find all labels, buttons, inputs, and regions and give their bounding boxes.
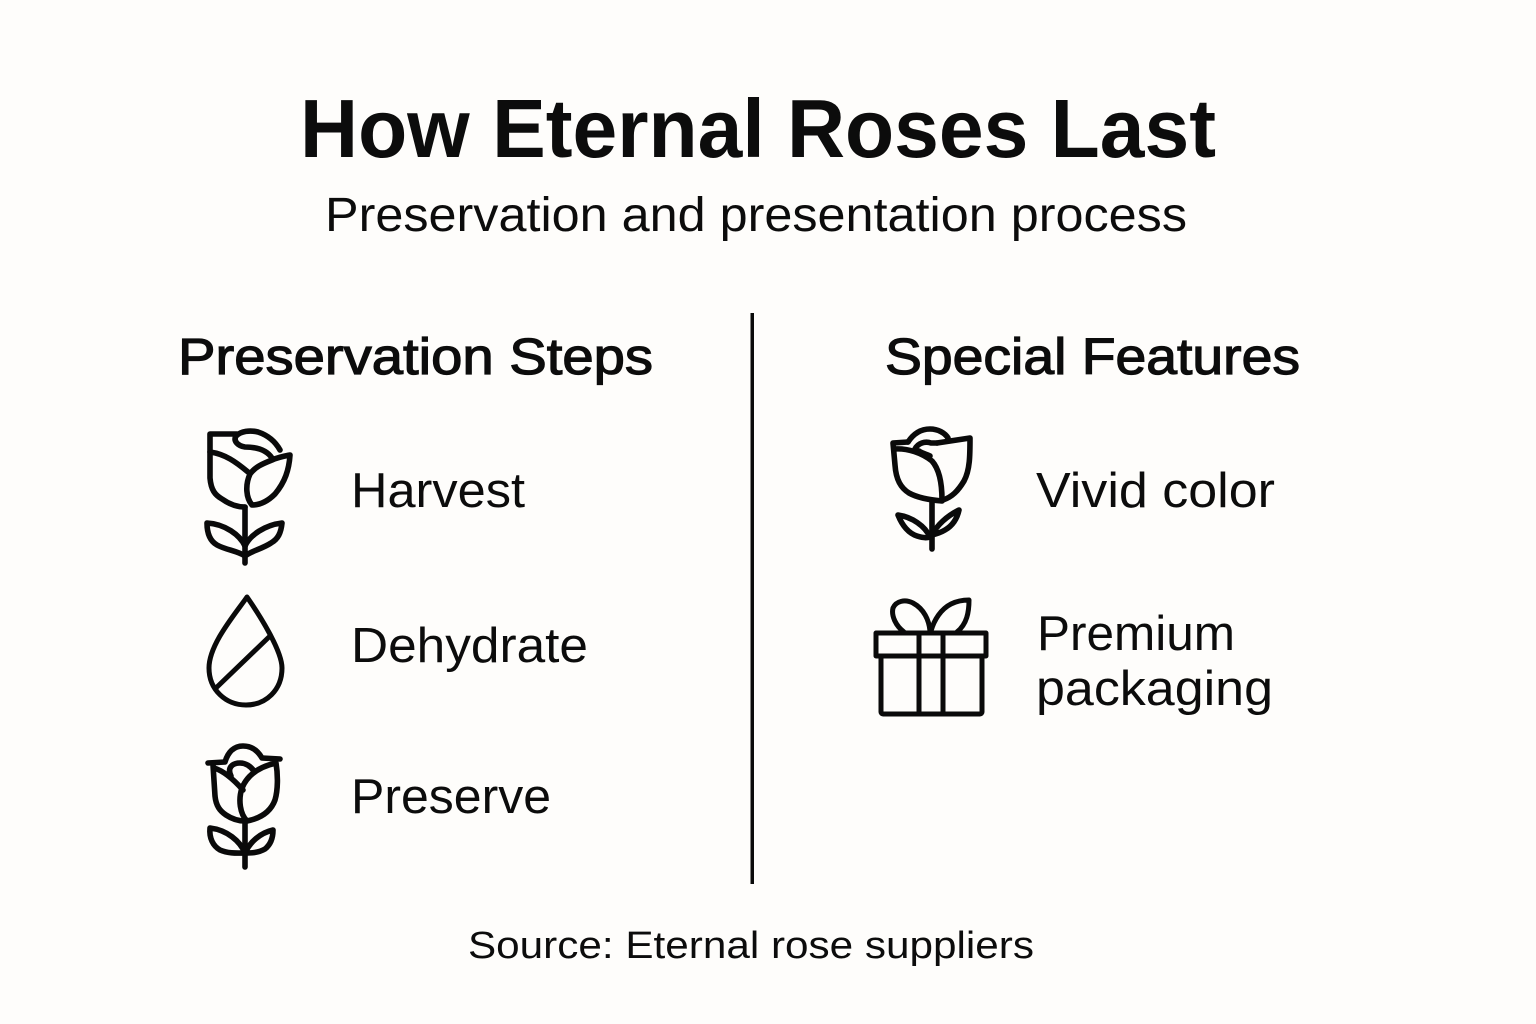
icon: water drop (209, 597, 282, 705)
panel: special features (876, 328, 1300, 716)
heading: special features: Special Features (885, 328, 1300, 385)
label: vivid color: Vivid color (1036, 464, 1275, 518)
source note: Source: Eternal rose suppliers (468, 925, 1034, 967)
icon: preserve rose (208, 746, 280, 867)
title: How Eternal Roses Last (300, 82, 1216, 175)
label: premium packaging: packaging (1036, 662, 1273, 716)
heading: preservation steps: Preservation Steps (178, 328, 653, 385)
label: premium packaging: Premium (1037, 607, 1235, 661)
label: harvest: Harvest (351, 464, 525, 518)
divider (750, 313, 754, 884)
subtitle: Preservation and presentation process (325, 189, 1187, 242)
label: premium packaging (1036, 607, 1273, 716)
panel: preservation steps (178, 328, 653, 867)
label: dehydrate: Dehydrate (351, 619, 588, 673)
icon: vivid color rose (893, 429, 970, 549)
icon: harvest rose (207, 431, 290, 563)
icon: gift box (876, 600, 986, 714)
label: preserve: Preserve (351, 770, 551, 824)
